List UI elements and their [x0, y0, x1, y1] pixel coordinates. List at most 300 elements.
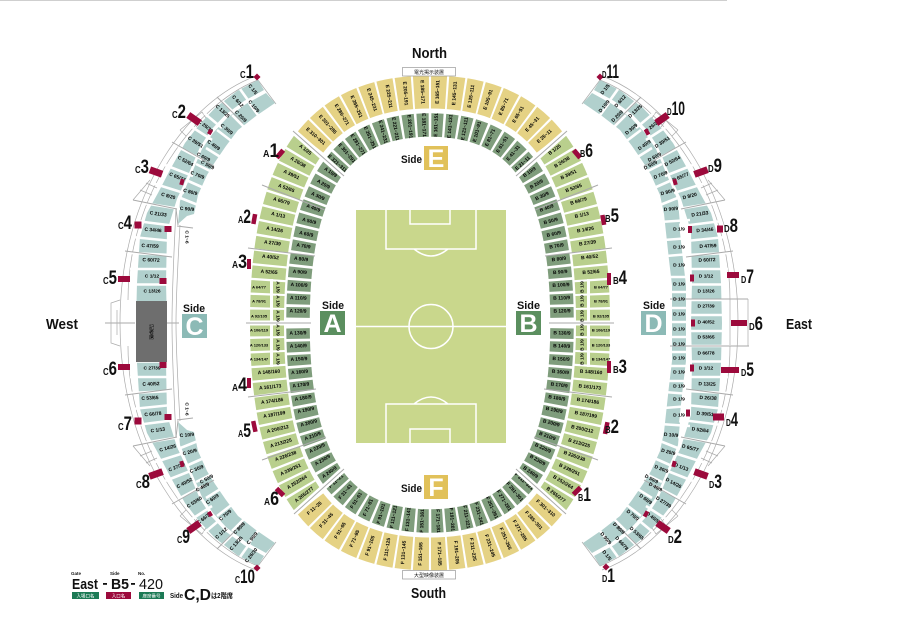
stand A west inner: A 213/225: [269, 437, 293, 449]
gate markers stand C: C3: [135, 157, 149, 178]
top rule: [0, 0, 727, 1]
gate markers inner: A3: [232, 252, 247, 273]
stand D outer east: D 65/77: [681, 443, 699, 454]
stand C outer west: C 13/25: [229, 535, 245, 552]
side badge E: E: [428, 145, 444, 173]
stand D outer east: D 53/65: [628, 526, 645, 542]
stand A west inner: A 140/9: [290, 343, 307, 350]
big screen sign: 大型映像装置: [414, 572, 444, 579]
gate markers stand D: D7: [741, 267, 754, 288]
stand B east inner: B 26/38: [553, 155, 571, 170]
side badge C: [182, 303, 207, 341]
stand A west inner: A 64/77: [252, 284, 267, 290]
stand E north: E 41~31: [505, 144, 522, 162]
stand E north: E 201~191: [405, 114, 414, 139]
stand E north: E 185~171: [419, 80, 425, 104]
stand E north: E 21~11: [514, 155, 532, 172]
stand C outer west: C 26/38: [197, 119, 214, 134]
gate markers inner: B3: [613, 357, 627, 378]
stand F south: F 31~41: [338, 483, 354, 501]
gate markers stand C: [103, 62, 261, 588]
stand D outer east: D 40/9: [647, 482, 663, 494]
stand C outer west: C 66/78: [144, 411, 162, 418]
stand B east inner: B 10/9: [522, 166, 538, 179]
stand A west inner: A 240/9: [321, 465, 339, 480]
stand C outer west: C 53/65: [186, 495, 204, 510]
stand C outer west: [105, 76, 276, 570]
stand D outer east: D 1/9: [673, 296, 685, 302]
stand A west inner: A 226/238: [274, 450, 298, 463]
stand C outer west: C 1/5: [246, 83, 259, 96]
legend: 座席番号: [142, 592, 161, 600]
legend: Side: [170, 591, 183, 600]
stand D outer east: D 30/9: [653, 464, 669, 475]
stand D outer east: D 10/9: [598, 99, 612, 114]
stand A west inner: A 50/9: [301, 217, 317, 226]
stand D outer east: D 80/9: [611, 521, 626, 536]
stand A west inner: A 1/9: [274, 281, 280, 293]
compass labels: South: [411, 585, 446, 602]
side badge A: Side: [322, 300, 344, 312]
stand B east inner: B 200/9: [542, 418, 560, 429]
stand D outer east: D 70/9: [653, 170, 669, 181]
stand F south: F 231~241: [473, 502, 484, 526]
stand D outer east: D 70/9: [625, 509, 640, 523]
stand A west inner: A 210/9: [304, 431, 322, 442]
stand B east inner: B 1/9: [580, 353, 586, 365]
stand B east inner: B 40/9: [539, 203, 555, 214]
stand E north: E 121~111: [460, 117, 470, 141]
stand A west inner: A 52/65: [277, 183, 295, 194]
compass labels: North: [412, 45, 447, 62]
stand B east inner: B 52/65: [582, 269, 600, 276]
stand D outer east: D 26/38: [644, 119, 662, 134]
stand B east inner: B 14/26: [577, 226, 595, 234]
stand C outer west: C 26/30: [244, 547, 259, 564]
stand E north: E 221~211: [390, 117, 400, 141]
stand C outer west: C 34/46: [144, 227, 162, 234]
stand D outer east: D 1/13: [673, 462, 689, 473]
stand D outer east: D 1/9: [673, 342, 685, 348]
stand D outer east: D 1/9: [673, 312, 685, 318]
stand C outer west: C 27/39: [168, 461, 186, 474]
legend: B5: [111, 576, 129, 593]
stand C outer west: 記者席: [148, 324, 154, 341]
stand F south: F 291~301: [505, 481, 524, 503]
stand A west inner: A 134/147: [250, 356, 269, 362]
stand C outer west: C 40/9: [195, 481, 211, 494]
stand C outer west: C 13/26: [143, 288, 161, 294]
gate markers inner: [232, 141, 627, 510]
stand A west inner: A 20/9: [316, 178, 331, 191]
stand B east inner: B 80/9: [551, 256, 567, 263]
stand D outer east: D 1/9: [673, 356, 685, 362]
stand D outer east: D 90/9: [664, 206, 679, 213]
stand E north: E 25~11: [536, 128, 554, 145]
stand C outer west: C 21/33: [149, 210, 167, 219]
stand D outer east: D 50/9: [643, 159, 659, 172]
stand E north: [298, 76, 562, 172]
stand B east inner: B 1/9: [580, 324, 586, 336]
stand D outer east: D 20/9: [610, 109, 625, 124]
stand C outer west: C 20/9: [233, 109, 248, 124]
stand C outer west: C 65/77: [168, 172, 187, 184]
stand E north: E 105~91: [482, 89, 495, 111]
stand A west inner: A 52/65: [260, 269, 278, 276]
stand D outer east: D 1/5: [600, 83, 612, 96]
stand C outer west: C 1/12: [214, 526, 229, 541]
stand D outer east: [582, 76, 749, 570]
stand F south: F 231~245: [483, 534, 496, 558]
stand C outer west: C 40/52: [142, 381, 160, 388]
stand C outer west: C 39/51: [186, 135, 204, 150]
side badge F: Side: [401, 483, 422, 495]
stand B east inner: B 1/13: [574, 211, 590, 220]
stand A west inner: A 160/9: [291, 369, 309, 376]
legend: 入口名: [112, 592, 125, 600]
legend: East: [72, 576, 98, 593]
stand A west inner: [250, 136, 341, 510]
stand C outer west: C 10/9: [246, 99, 260, 114]
stand F south: [298, 473, 562, 570]
block divider lines, inner stands: [246, 131, 614, 514]
stand E north: E 81~71: [484, 128, 497, 147]
stand F south: F 191~205: [452, 541, 460, 565]
stand B east inner: B 150/9: [552, 356, 570, 363]
stand C outer west: C 50/9: [199, 160, 215, 172]
stand A west inner: A 1/9: [274, 310, 280, 322]
side badge D: D: [644, 310, 663, 338]
stand D outer east: D 1/9: [673, 226, 685, 232]
stand D outer east: D 40/52: [645, 511, 662, 526]
gate markers stand C: C10: [235, 567, 255, 588]
stand A west inner: A 14/26: [266, 226, 284, 234]
legend: 入場口名: [76, 592, 94, 600]
stand F south: F 151~161: [419, 509, 426, 533]
stand B east inner: B 187/199: [574, 410, 598, 420]
gate markers inner: A6: [264, 489, 279, 510]
stand C outer west: C 27/39: [143, 366, 161, 372]
stand C outer west: C 80/9: [182, 188, 198, 197]
gate markers inner: A4: [232, 375, 247, 396]
stand E north: E 125~111: [467, 84, 476, 108]
stand B east inner: B 120/9: [553, 308, 571, 315]
stand C outer west: C 90/9: [246, 531, 260, 546]
stand C outer west: C 14/26: [159, 443, 177, 454]
legend: No.: [138, 571, 145, 576]
stand B east inner: B 20/9: [529, 178, 545, 191]
stand D outer east: D 26/38: [699, 395, 717, 402]
stand B east inner: B 110/9: [553, 295, 570, 302]
stand B east inner: B 92/105: [593, 314, 610, 318]
gate markers inner: B2: [605, 417, 619, 438]
gate markers inner: B1: [578, 485, 591, 506]
stand F south: F 131~141: [404, 507, 413, 531]
side badge A: [320, 300, 345, 338]
stand E north: E 181~171: [420, 113, 427, 137]
stand F south: F 271~285: [511, 519, 528, 543]
stand A west inner: A 120/9: [289, 308, 307, 315]
stand A west inner: A 130/9: [289, 330, 307, 337]
stand D outer east: D 1/12: [699, 274, 713, 280]
stand D outer east: D 60/72: [698, 257, 716, 264]
stand A west inner: A 1/9: [274, 339, 280, 351]
gate markers stand D: D10: [667, 99, 685, 120]
stand D outer east: D 52/64: [691, 426, 709, 435]
stand B east inner: B 27/39: [579, 239, 597, 248]
stand A west inner: A 1/9: [274, 295, 280, 307]
compass labels: West: [46, 316, 78, 333]
stand D outer east: D 10/9: [664, 432, 679, 439]
stand C outer west: C 30/9: [189, 464, 205, 475]
stand A west inner: A 40/9: [305, 203, 321, 214]
stand E north: E 225~211: [384, 84, 393, 109]
stand C outer west: C 53/65: [141, 395, 159, 402]
legend: Side: [110, 571, 120, 576]
stand E north: E 165~151: [435, 80, 441, 104]
stand F south: F 211~221: [461, 505, 471, 529]
stand A west inner: A 161/173: [259, 383, 282, 392]
stand B east inner: [519, 136, 610, 510]
stand A west inner: A 26/38: [289, 156, 307, 170]
stand A west inner: A 100/9: [290, 282, 308, 289]
gate markers stand C: C8: [136, 472, 150, 493]
gate markers stand D: D8: [724, 216, 738, 237]
stand D outer east: D 34/46: [696, 227, 714, 234]
stand F south: F 171~181: [434, 509, 441, 533]
stand F south: F 251~265: [498, 527, 512, 551]
gate markers stand C: C1: [240, 62, 254, 83]
stand D outer east: D 8/20: [682, 192, 698, 201]
stand F south: F 11~25: [306, 500, 324, 517]
stand E north: E 321~311: [326, 154, 348, 174]
stand D outer east: D 21/33: [691, 210, 709, 219]
legend: C,D: [184, 587, 211, 604]
stand B east inner: B 180/9: [548, 394, 566, 403]
stand C outer west: C 1~6: [184, 230, 190, 244]
stand C outer west: C 70/9: [218, 509, 233, 523]
stand C outer west: C 60/9: [195, 152, 211, 164]
stand D outer east: D 27/39: [654, 495, 672, 510]
gate markers inner: B6: [580, 141, 593, 162]
stand F south: F 171~185: [436, 542, 442, 566]
gate markers stand D: D4: [726, 410, 738, 431]
stand C outer west: C 6/12: [230, 94, 245, 109]
gate markers stand D: D6: [749, 314, 763, 335]
stand D outer east: D 13/25: [627, 103, 644, 120]
stand A west inner: A 106/119: [250, 328, 269, 332]
stand E north: E 265~251: [349, 95, 363, 119]
gate markers stand D: D3: [709, 472, 722, 493]
stand C outer west: C 52/64: [176, 155, 194, 168]
stand F south: F 11~21: [328, 473, 345, 490]
stand B east inner: B 78/91: [594, 298, 609, 304]
stand B east inner: B 213/225: [567, 438, 591, 450]
stand A west inner: A 200/9: [300, 418, 318, 429]
stand E north: E 281~271: [349, 133, 366, 157]
gate markers inner: A2: [238, 207, 251, 228]
stand A west inner: A 148/160: [258, 369, 281, 376]
stand A west inner: A 187/199: [263, 410, 286, 420]
gate markers inner: B4: [613, 268, 627, 289]
stand F south: F 111~125: [383, 537, 392, 561]
gate markers stand D: D5: [741, 360, 754, 381]
stand A west inner: A 1/9: [274, 324, 280, 336]
stand D outer east: D 30/9: [624, 123, 639, 137]
stand E north: E 145~131: [451, 81, 459, 106]
stand D outer east: D 14/26: [664, 477, 682, 490]
stand E north: E 141~131: [446, 114, 455, 139]
stand B east inner: B 190/9: [545, 406, 563, 415]
stand B east inner: B 100/9: [552, 282, 570, 289]
stand C outer west: C 1/13: [150, 426, 166, 434]
stand C outer west: C 50/9: [199, 473, 215, 486]
stand A west inner: A 40/52: [262, 254, 279, 261]
stand C outer west: C 60/9: [205, 493, 221, 506]
stand D outer east: D 1/9: [673, 370, 685, 376]
stand A west inner: A 78/91: [252, 298, 267, 304]
stand B east inner: B 134/147: [592, 356, 611, 362]
stand D outer east: D 80/9: [660, 188, 676, 197]
stand A west inner: A 200/212: [266, 424, 290, 435]
stand B east inner: B 40/52: [581, 254, 599, 261]
stand C outer west: C 10/9: [180, 432, 195, 439]
stand B east inner: B 1/9: [580, 339, 586, 351]
scoreboard sign: [402, 68, 456, 76]
stand D outer east: D 1/9: [673, 396, 685, 402]
stand B east inner: B 90/9: [553, 269, 568, 276]
gate markers stand D: D11: [602, 62, 619, 83]
stand E north: E 65~51: [511, 105, 526, 124]
stand A west inner: A 66/79: [272, 196, 291, 207]
stand B east inner: B 174/186: [576, 397, 600, 406]
stand B east inner: B 66/79: [570, 196, 588, 207]
stand D outer east: D 66/78: [697, 350, 715, 356]
stand D outer east: D 13/26: [697, 288, 715, 294]
stand C outer west: C 66/78: [196, 511, 214, 526]
stand D outer east: D 1/9: [673, 282, 685, 288]
stand B east inner: B 106/119: [592, 328, 611, 332]
stand E north: E 85~71: [498, 97, 510, 116]
stand B east inner: B 239/251: [558, 463, 581, 478]
stand F south: F 71~85: [349, 529, 361, 548]
stand E north: E 245~231: [365, 88, 378, 112]
stand D outer east: D 39/51: [654, 135, 672, 150]
stand A west inner: A 90/9: [292, 269, 307, 276]
big screen sign: [402, 570, 456, 579]
stand D outer east: D 1/9: [673, 244, 685, 250]
side badge D: Side: [643, 300, 665, 312]
stand D outer east: D 66/78: [613, 535, 630, 552]
stand B east inner: B 1/25: [547, 143, 563, 157]
stand A west inner: A 170/9: [292, 381, 310, 390]
stand F south: F 111~121: [389, 505, 399, 529]
stand E north: E 285~271: [333, 103, 350, 127]
stand C outer west: C 30/9: [219, 123, 234, 137]
stand B east inner: B 160/9: [552, 369, 569, 376]
stand B east inner: B 52/65: [565, 183, 583, 194]
stand D outer east: D 1/9: [673, 326, 685, 332]
stand F south: F 311~321: [513, 472, 534, 492]
stand B east inner: B 50/9: [543, 217, 559, 226]
stand B east inner: B 265/277: [545, 486, 567, 504]
stand A west inner: A 150/9: [290, 356, 308, 363]
stand D outer east: D 27/39: [697, 304, 715, 310]
stand A west inner: A 92/105: [251, 314, 268, 318]
stand F south: F 271~281: [495, 489, 512, 513]
side badge A: A: [323, 310, 342, 338]
stand C outer west: C 40/52: [176, 477, 194, 490]
stand B east inner: B 1/9: [580, 295, 586, 307]
stand A west inner: A 39/51: [282, 169, 300, 181]
stand C outer west: C 13/25: [214, 104, 231, 120]
stand F south: F 301~310: [534, 499, 556, 519]
stand F south: F 31~45: [318, 512, 335, 529]
stand D outer east: D 60/9: [647, 151, 663, 164]
stand B east inner: B 161/173: [578, 383, 602, 392]
stand B east inner: B 148/160: [580, 369, 603, 376]
stand D outer east: D 1/5: [600, 549, 613, 562]
stand E north: E 310~301: [304, 127, 326, 147]
stand D outer east: D 50/9: [643, 474, 659, 486]
scoreboard sign: 電光掲示装置: [414, 69, 444, 76]
stand D outer east: D 20/9: [660, 448, 676, 457]
gate markers stand C: C7: [118, 414, 132, 435]
stand A west inner: A 220/9: [308, 442, 326, 455]
gate markers stand C: C5: [103, 268, 117, 289]
legend: [71, 571, 233, 604]
side badge B: [516, 300, 541, 338]
stand F south: F 51~65: [333, 521, 348, 540]
stand B east inner: B 120/133: [592, 342, 611, 348]
gate markers inner: A1: [263, 141, 279, 162]
stand B east inner: B 30/9: [534, 191, 550, 202]
stand D outer east: D 52/64: [664, 155, 682, 168]
stand D outer east: D 40/52: [697, 320, 715, 326]
gate markers stand C: C6: [103, 359, 117, 380]
stand A west inner: A 80/9: [294, 256, 309, 263]
stand D outer east: D 90/9: [598, 531, 612, 546]
side badge E: [401, 145, 448, 173]
stand F south: F 71~81: [362, 498, 375, 517]
stand F south: F 51~61: [349, 491, 364, 510]
stand B east inner: B 1/9: [580, 281, 586, 293]
stand D outer east: D 1/9: [673, 412, 685, 418]
stand A west inner: A 1/25: [298, 143, 313, 157]
stand C outer west: C 70/9: [189, 170, 205, 181]
side badge E: Side: [401, 154, 422, 166]
stand F south: F 191~201: [447, 507, 456, 532]
stand A west inner: A 239/251: [279, 462, 302, 477]
stand A west inner: A 10/9: [323, 166, 338, 179]
gate markers stand D: D9: [708, 156, 722, 177]
gate markers stand C: C2: [172, 102, 186, 123]
stand E north: E 101~91: [472, 121, 483, 143]
stand C outer west: C 60/72: [142, 257, 160, 264]
legend: 420: [139, 576, 163, 593]
stand B east inner: B 252/264: [552, 474, 574, 491]
stand B east inner: B 64/77: [594, 284, 609, 290]
stand D outer east: D 53/65: [697, 334, 715, 340]
stand D outer east: D 6/12: [614, 94, 628, 109]
stand D outer east: D 47/59: [699, 243, 717, 250]
stand B east inner: B 226/238: [563, 450, 586, 463]
gate markers stand D: [596, 62, 763, 587]
stand C outer west: C 8/20: [160, 192, 176, 201]
stand B east inner: B 170/9: [550, 381, 568, 390]
side badge F: [401, 474, 448, 502]
stand F south: F 251~261: [484, 496, 499, 520]
